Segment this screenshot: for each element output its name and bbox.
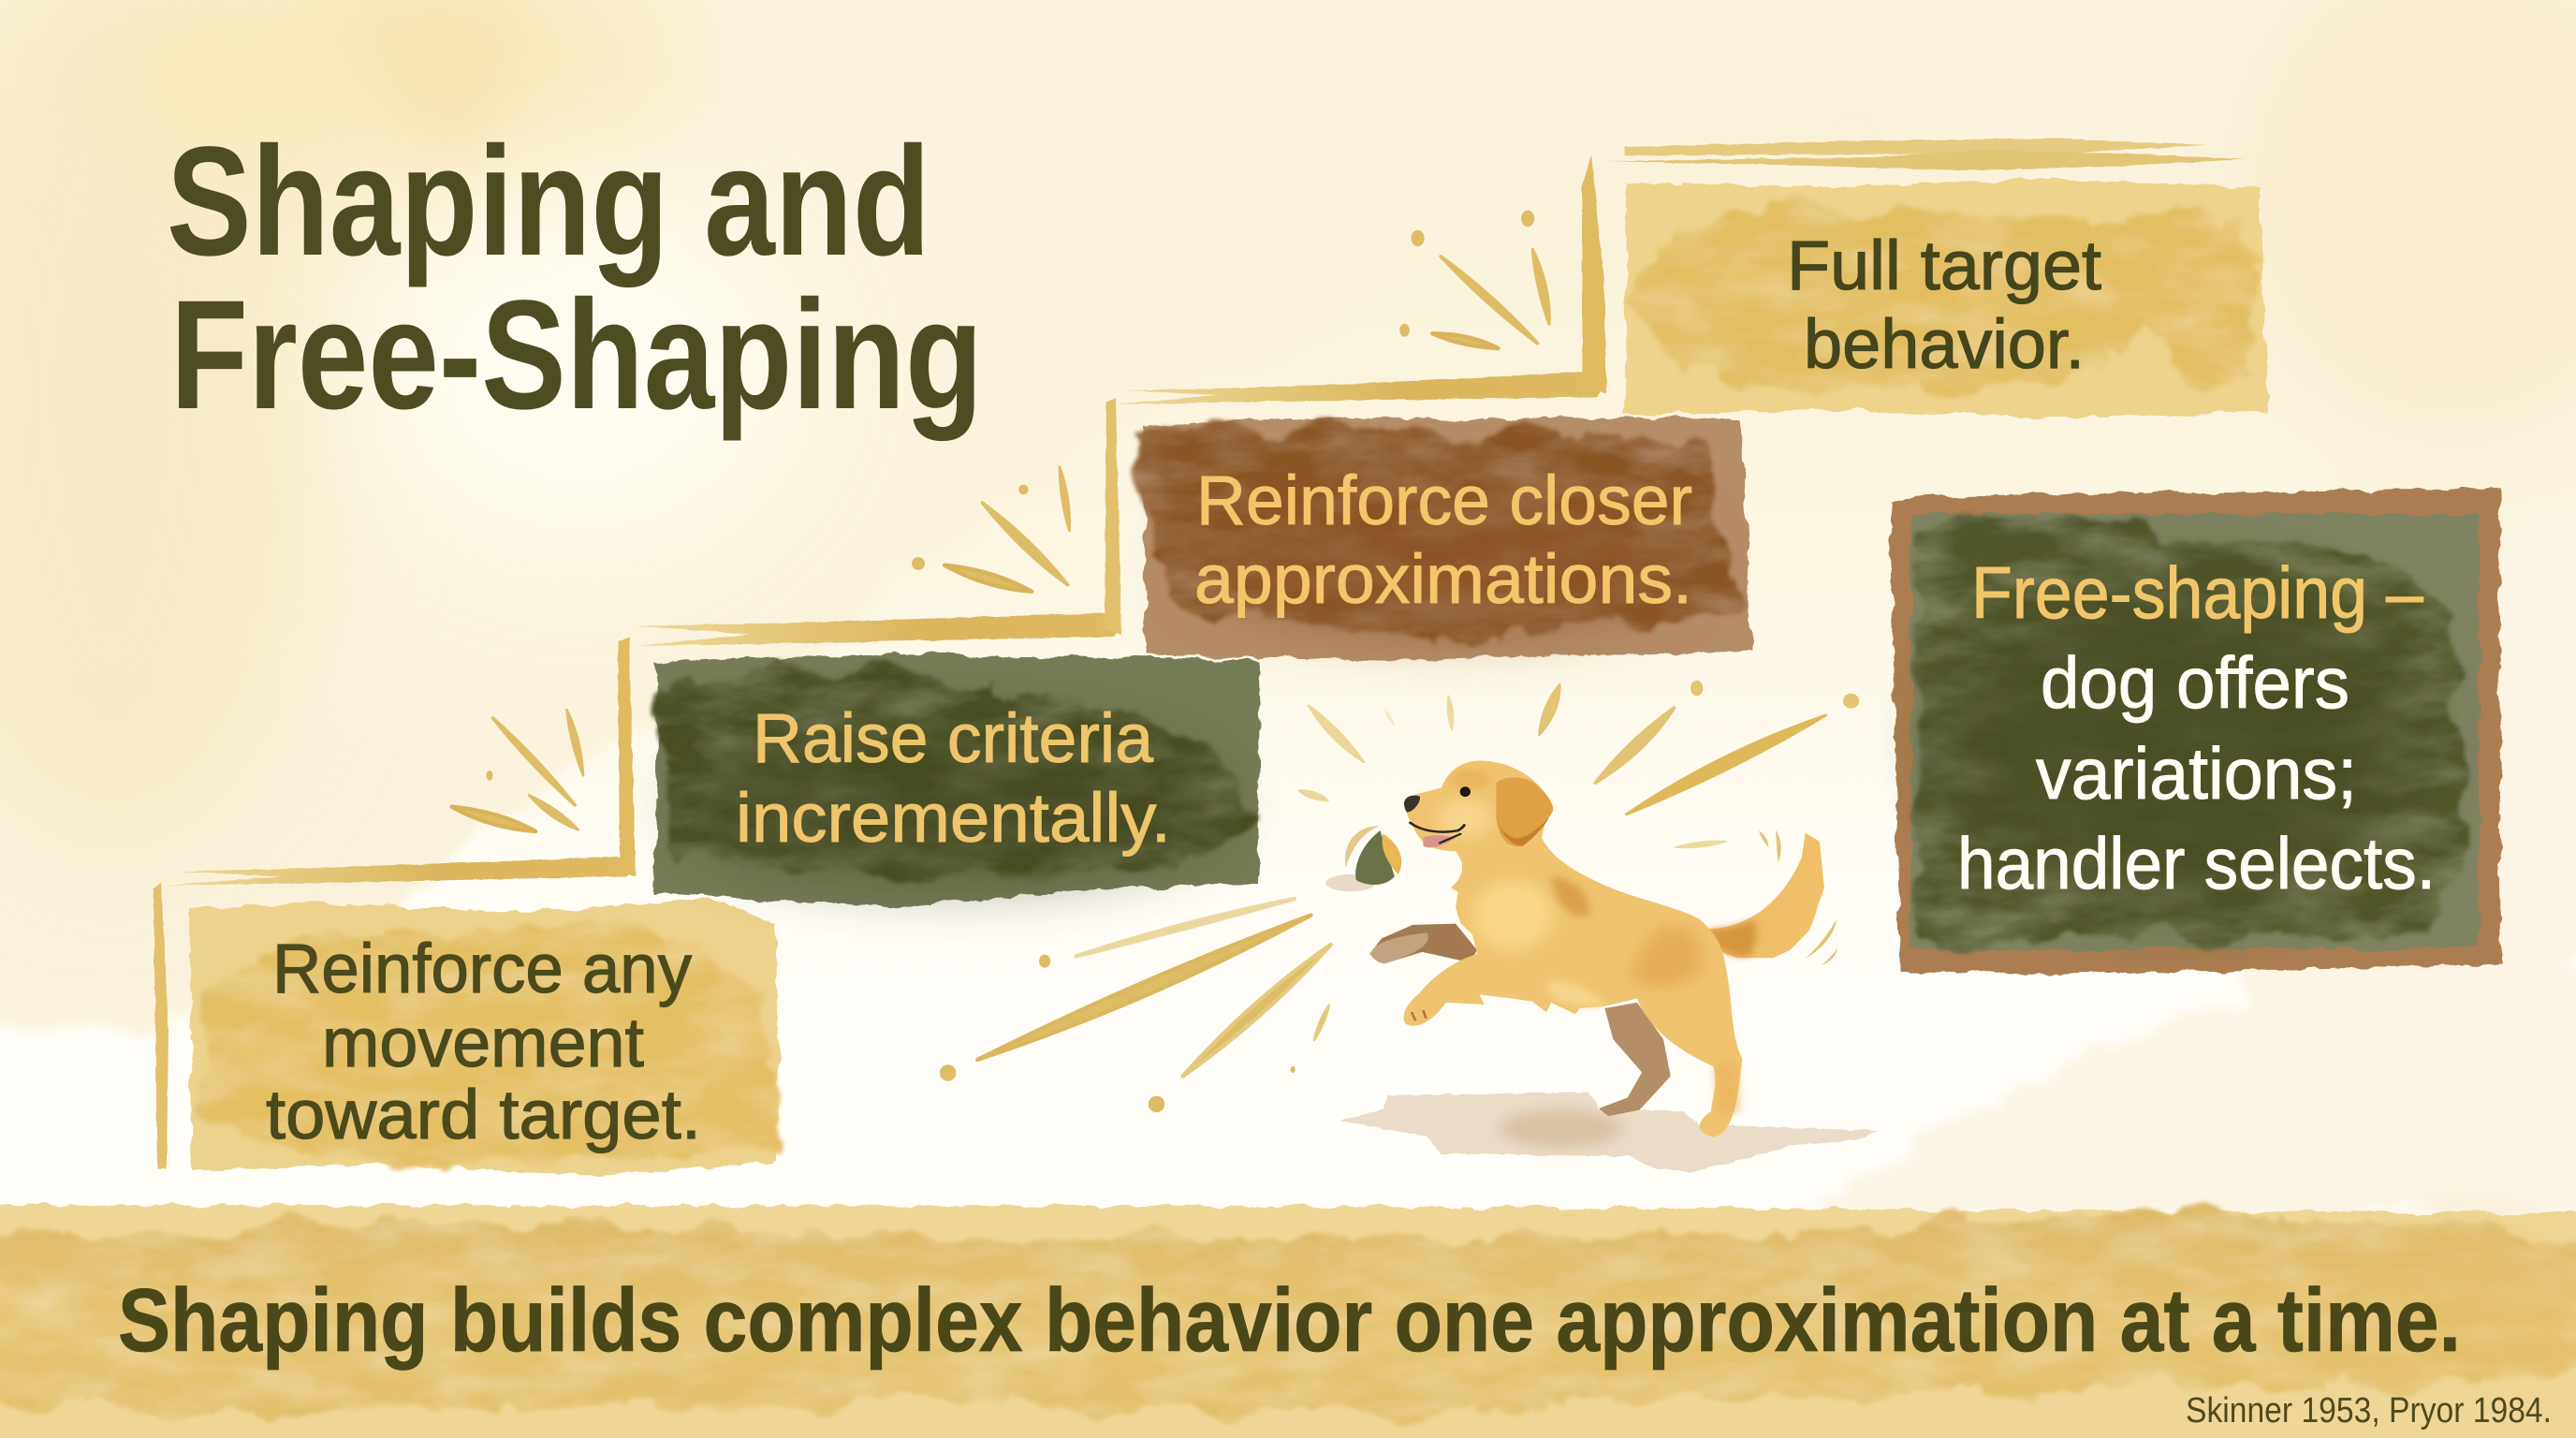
fur shading — [1437, 770, 1740, 1113]
nose — [1404, 796, 1420, 813]
burst rays around dog — [1299, 681, 1859, 965]
title: Free-Shaping — [170, 269, 983, 442]
ball — [1325, 826, 1401, 891]
free-shaping text — [1957, 551, 2436, 904]
panel: step 4 full target — [1625, 178, 2269, 418]
illustration: golden retriever with ball — [1299, 681, 1876, 1172]
step 1 text: Reinforce any — [272, 930, 692, 1007]
step 2 text — [736, 699, 1171, 857]
free-shaping text: handler selects. — [1957, 822, 2436, 904]
step 2 text: incrementally. — [736, 779, 1171, 857]
step 1 text: movement — [322, 1004, 644, 1081]
ground shadow — [1340, 1092, 1876, 1172]
far hind leg — [1599, 1003, 1671, 1116]
step 3 text: Reinforce closer — [1196, 462, 1692, 539]
eye — [1460, 786, 1471, 797]
ear — [1496, 777, 1553, 846]
free-shaping text: Free-shaping – — [1971, 551, 2424, 634]
step 1 text: toward target. — [266, 1076, 701, 1153]
free-shaping text: variations; — [2036, 732, 2357, 814]
title — [167, 115, 983, 442]
step 2 text: Raise criteria — [753, 699, 1154, 777]
panel: step 3 reinforce closer — [1144, 418, 1752, 660]
tail — [1709, 833, 1824, 958]
staircase gold line — [154, 139, 2246, 1168]
title: Shaping and — [167, 115, 930, 288]
step 4 text: behavior. — [1804, 305, 2085, 383]
free-shaping text: dog offers — [2041, 641, 2349, 724]
panel: step 2 raise criteria — [655, 653, 1260, 906]
footer band — [0, 1205, 2576, 1438]
step 4 text — [1787, 227, 2101, 383]
panel: free-shaping note — [1890, 489, 2501, 974]
step 3 text: approximations. — [1194, 540, 1692, 618]
panel: step 1 reinforce any movement — [189, 901, 779, 1176]
mouth and tongue — [1411, 823, 1464, 847]
step 1 text — [266, 930, 701, 1153]
step 4 text: Full target — [1787, 227, 2101, 304]
dog body and head — [1404, 761, 1742, 1137]
step 3 text — [1194, 462, 1692, 618]
far front leg — [1369, 924, 1477, 963]
sparkles: step flourishes — [452, 211, 1549, 1112]
paw lines — [1412, 1010, 1426, 1020]
